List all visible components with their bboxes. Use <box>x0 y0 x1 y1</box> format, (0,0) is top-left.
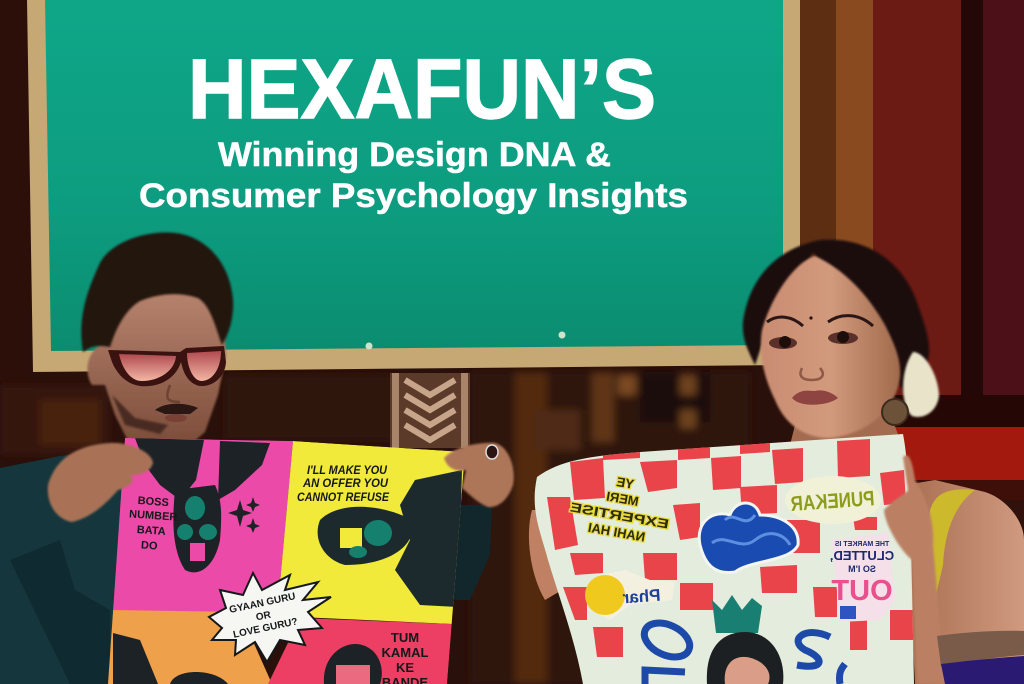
comic handkerchief <box>108 438 465 684</box>
green board <box>45 0 783 351</box>
cloth base <box>534 434 914 684</box>
speech burst <box>209 573 331 662</box>
sticker: punekar: PUNEKAR <box>790 487 875 516</box>
sticker: clutter out: THE MARKET IS <box>834 541 889 548</box>
neck and face <box>87 285 226 445</box>
sticker: expertise <box>568 476 670 543</box>
lower comic figures <box>113 633 382 684</box>
comic quote: kamal: KE <box>396 660 414 675</box>
bare shoulder and arm <box>905 480 1024 684</box>
comic quote: kamal: KAMAL <box>382 645 429 660</box>
left hand <box>529 510 562 600</box>
sticker: expertise: MERI <box>605 489 640 509</box>
ring <box>486 445 498 459</box>
bindi <box>809 316 813 320</box>
neck <box>790 385 900 445</box>
earring <box>882 399 908 425</box>
blue lettering <box>639 616 845 684</box>
hand: left <box>48 443 153 522</box>
yellow blouse strap <box>927 489 975 612</box>
title <box>139 42 688 215</box>
sticker: blue script <box>699 503 798 573</box>
speech burst: LOVE GURU? <box>232 616 299 641</box>
beard <box>112 395 168 434</box>
comic quote: kamal <box>382 630 429 684</box>
flower <box>903 352 939 417</box>
hand: right <box>444 443 514 507</box>
purple blouse <box>941 656 1024 684</box>
woman presenter <box>529 240 1024 684</box>
comic quote: boss number: BATA <box>136 524 166 538</box>
nose shadow <box>167 385 180 402</box>
figure: sideways man <box>318 470 462 607</box>
lips <box>792 390 838 405</box>
figure: inverted man <box>135 438 270 572</box>
inverted face details <box>177 496 217 540</box>
red panel <box>268 618 452 684</box>
sticker: expertise: YE <box>615 474 635 492</box>
comic quote: boss number <box>130 496 176 550</box>
sideways face details <box>340 528 362 548</box>
heading: brand name: HEXAFUN’S <box>188 42 656 136</box>
orange panel <box>108 610 272 684</box>
comic quote: offer <box>298 466 390 501</box>
checkered handkerchief <box>534 434 914 684</box>
man presenter <box>0 232 492 684</box>
comic quote: offer: CANNOT REFUSE <box>297 490 390 504</box>
red checks <box>547 439 913 657</box>
sticker: expertise: NAHI HAI <box>587 520 646 545</box>
board wooden frame <box>27 0 800 372</box>
eyebrows <box>767 316 873 326</box>
board pin dots <box>366 332 566 350</box>
hair <box>81 232 233 352</box>
sticker: clutter out: SO I'M <box>848 564 876 574</box>
subheading line 2: Consumer Psychology Insights <box>139 177 688 215</box>
comic quote: kamal: TUM <box>391 630 419 645</box>
comic quote: boss number: NUMBER <box>129 508 178 524</box>
comic quote: offer: AN OFFER YOU <box>302 476 388 490</box>
right hand on cloth <box>884 455 945 684</box>
eyes <box>769 331 858 349</box>
comic quote: offer: I'LL MAKE YOU <box>307 463 387 477</box>
comic quote: boss number: DO <box>141 539 158 553</box>
crown portrait <box>707 595 783 684</box>
nose <box>800 368 823 380</box>
sticker: phar: Phar <box>622 586 661 607</box>
face <box>761 256 900 438</box>
sticker: expertise: EXPERTISE <box>569 499 670 532</box>
saree sleeve <box>937 631 1024 666</box>
chevron wall panel <box>390 373 470 448</box>
icon: sparkles <box>228 497 260 533</box>
comic quote: boss number: BOSS <box>137 495 169 509</box>
subheading line 1: Winning Design DNA & <box>218 136 611 174</box>
right wall columns <box>800 0 1024 684</box>
hair <box>743 240 929 392</box>
sticker: clutter out: CLUTTED, <box>830 548 894 563</box>
sticker: clutter out <box>830 532 895 622</box>
sticker: phar <box>585 570 675 620</box>
sticker: punekar <box>785 476 881 524</box>
yellow panel <box>277 441 465 624</box>
sticker: clutter out: OUT <box>831 575 893 607</box>
jacket <box>0 450 130 684</box>
pink panel <box>108 438 293 616</box>
speech burst: GYAAN GURU <box>228 591 297 616</box>
moustache and mouth <box>155 404 198 414</box>
sunglasses <box>108 346 226 386</box>
speech burst: OR <box>255 609 273 623</box>
